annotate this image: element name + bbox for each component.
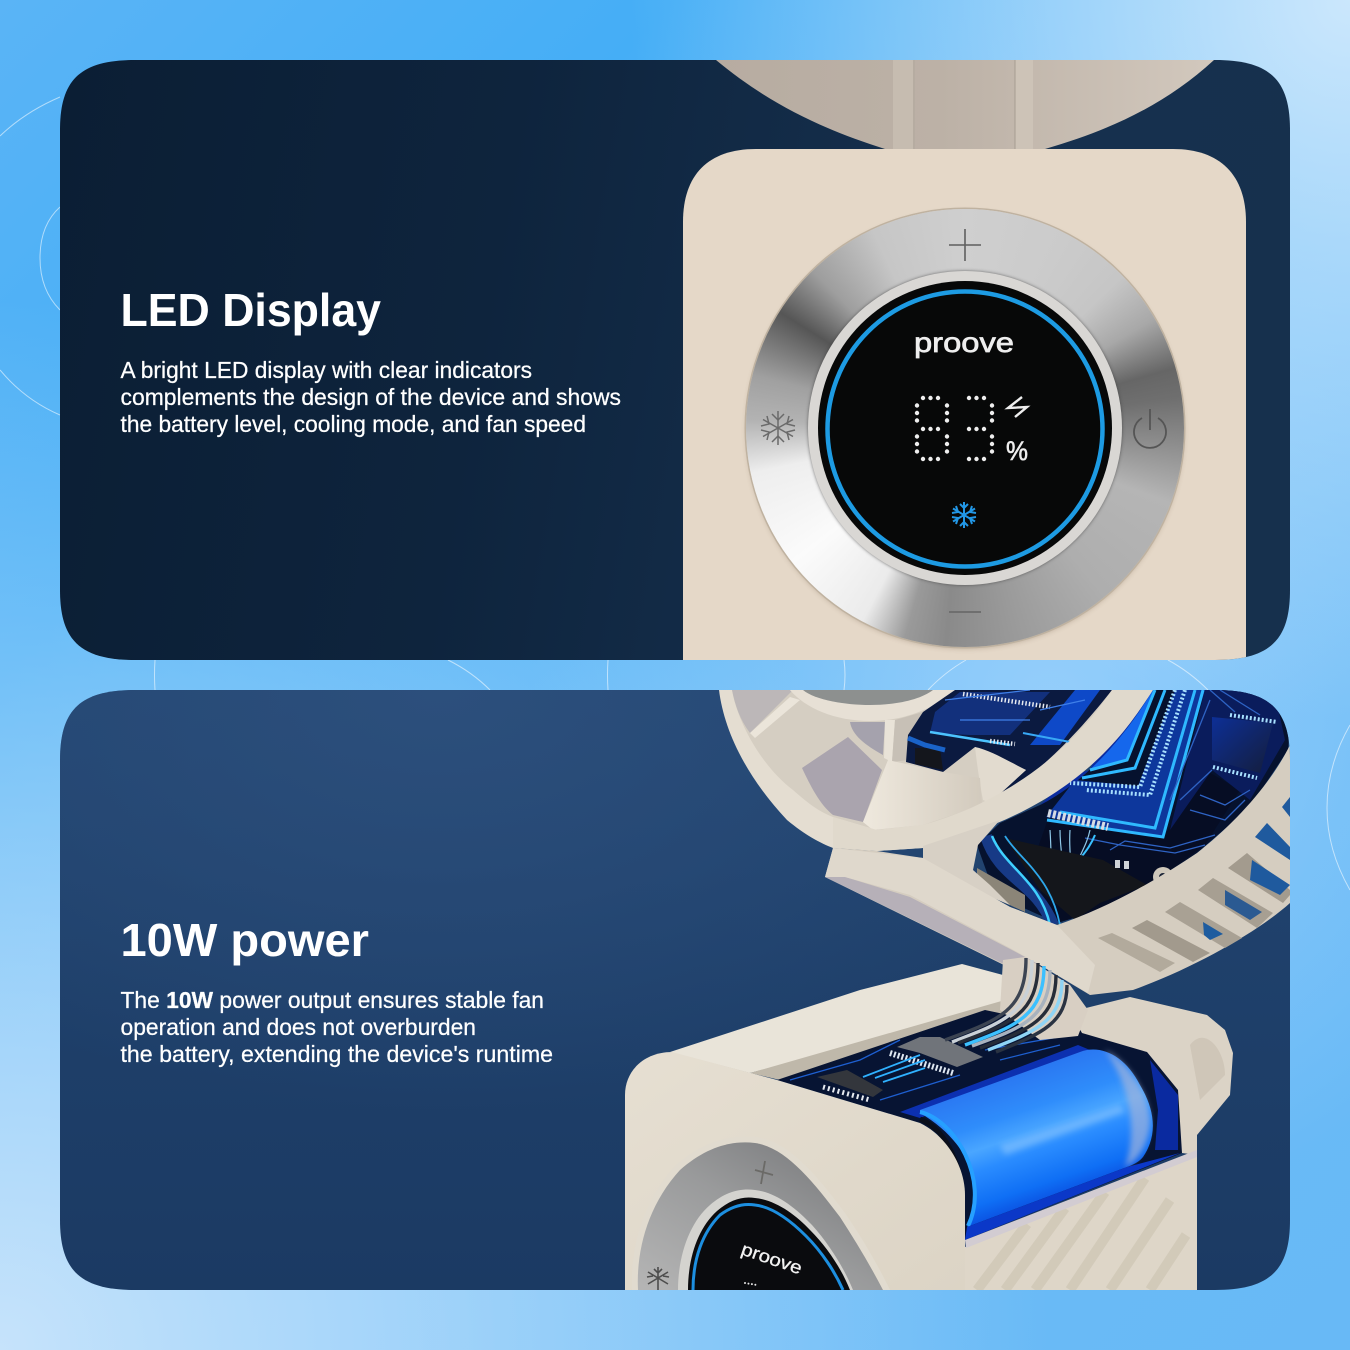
grey mount [977,868,1025,912]
arm highlight [825,848,1095,993]
panel: LED display [60,60,1290,660]
dial digit dots [745,1283,757,1285]
lower grey cover [923,820,1010,905]
outer circuit board [977,690,1290,925]
icon: blue snowflake [952,502,976,528]
icon: grey snowflake [761,411,795,445]
support arm and grille band [825,745,1290,995]
hinge knob [1190,1038,1225,1100]
logo: proove [914,327,1014,358]
centre blade [863,760,982,830]
icon: dial snowflake [647,1267,669,1290]
heading: LED Display: LED Display [120,284,381,336]
control dial [632,1136,890,1290]
text: power description: operation and does not overburden [120,1014,476,1040]
device: cutaway illustration [625,690,1290,1290]
icon: bolt [1008,397,1027,417]
body top ledge [670,964,1010,1073]
screen: blue ring [828,292,1102,566]
opening frame and hinge [1070,997,1233,1155]
digit 3 [969,398,992,459]
heading: 10W power: 10W power [120,914,369,966]
fan shell [719,690,1153,851]
dial: metal ring [746,209,1184,647]
dial: display and icons [760,229,1167,613]
fan interior [732,690,1112,830]
grille slots [1098,797,1290,972]
stem with wire bundle [945,957,1088,1052]
text: power description: the battery, extending the device's runtime [120,1041,553,1067]
battery lip [965,1150,1197,1248]
body front face [625,1052,965,1290]
digit 8 [917,398,947,459]
text: power description [120,987,553,1067]
arm underside [825,876,1040,968]
text: LED description [120,357,621,437]
motor block [1005,838,1147,920]
percent sign: % [1006,436,1028,466]
ledge shadow [750,1000,1010,1080]
inner circuit board [906,690,1112,803]
device: fan head and body [683,60,1246,660]
icon: minus [949,611,981,613]
icon: power [1134,409,1166,448]
icon: dial plus [755,1161,773,1184]
icon: plus [949,229,981,261]
text: LED description: the battery level, cooling mode, and fan speed [120,411,586,437]
blue wires [986,836,1060,925]
fan blades [732,690,955,822]
battery [920,1049,1180,1240]
text: LED description: complements the design of the device and shows [120,384,621,410]
dial logo: proove [739,1239,805,1278]
text: LED description: A bright LED display with clear indicators [120,357,532,383]
ribbed side [965,1155,1197,1290]
cut blade [975,747,1026,803]
panel: 10W power [60,690,1290,1290]
text: power description: The 10W power output ensures stable fan [120,987,544,1013]
fan front rim [833,690,1153,851]
body opening [777,1010,1182,1240]
screen: black disc [818,281,1112,575]
circuit in body [790,1035,1178,1150]
